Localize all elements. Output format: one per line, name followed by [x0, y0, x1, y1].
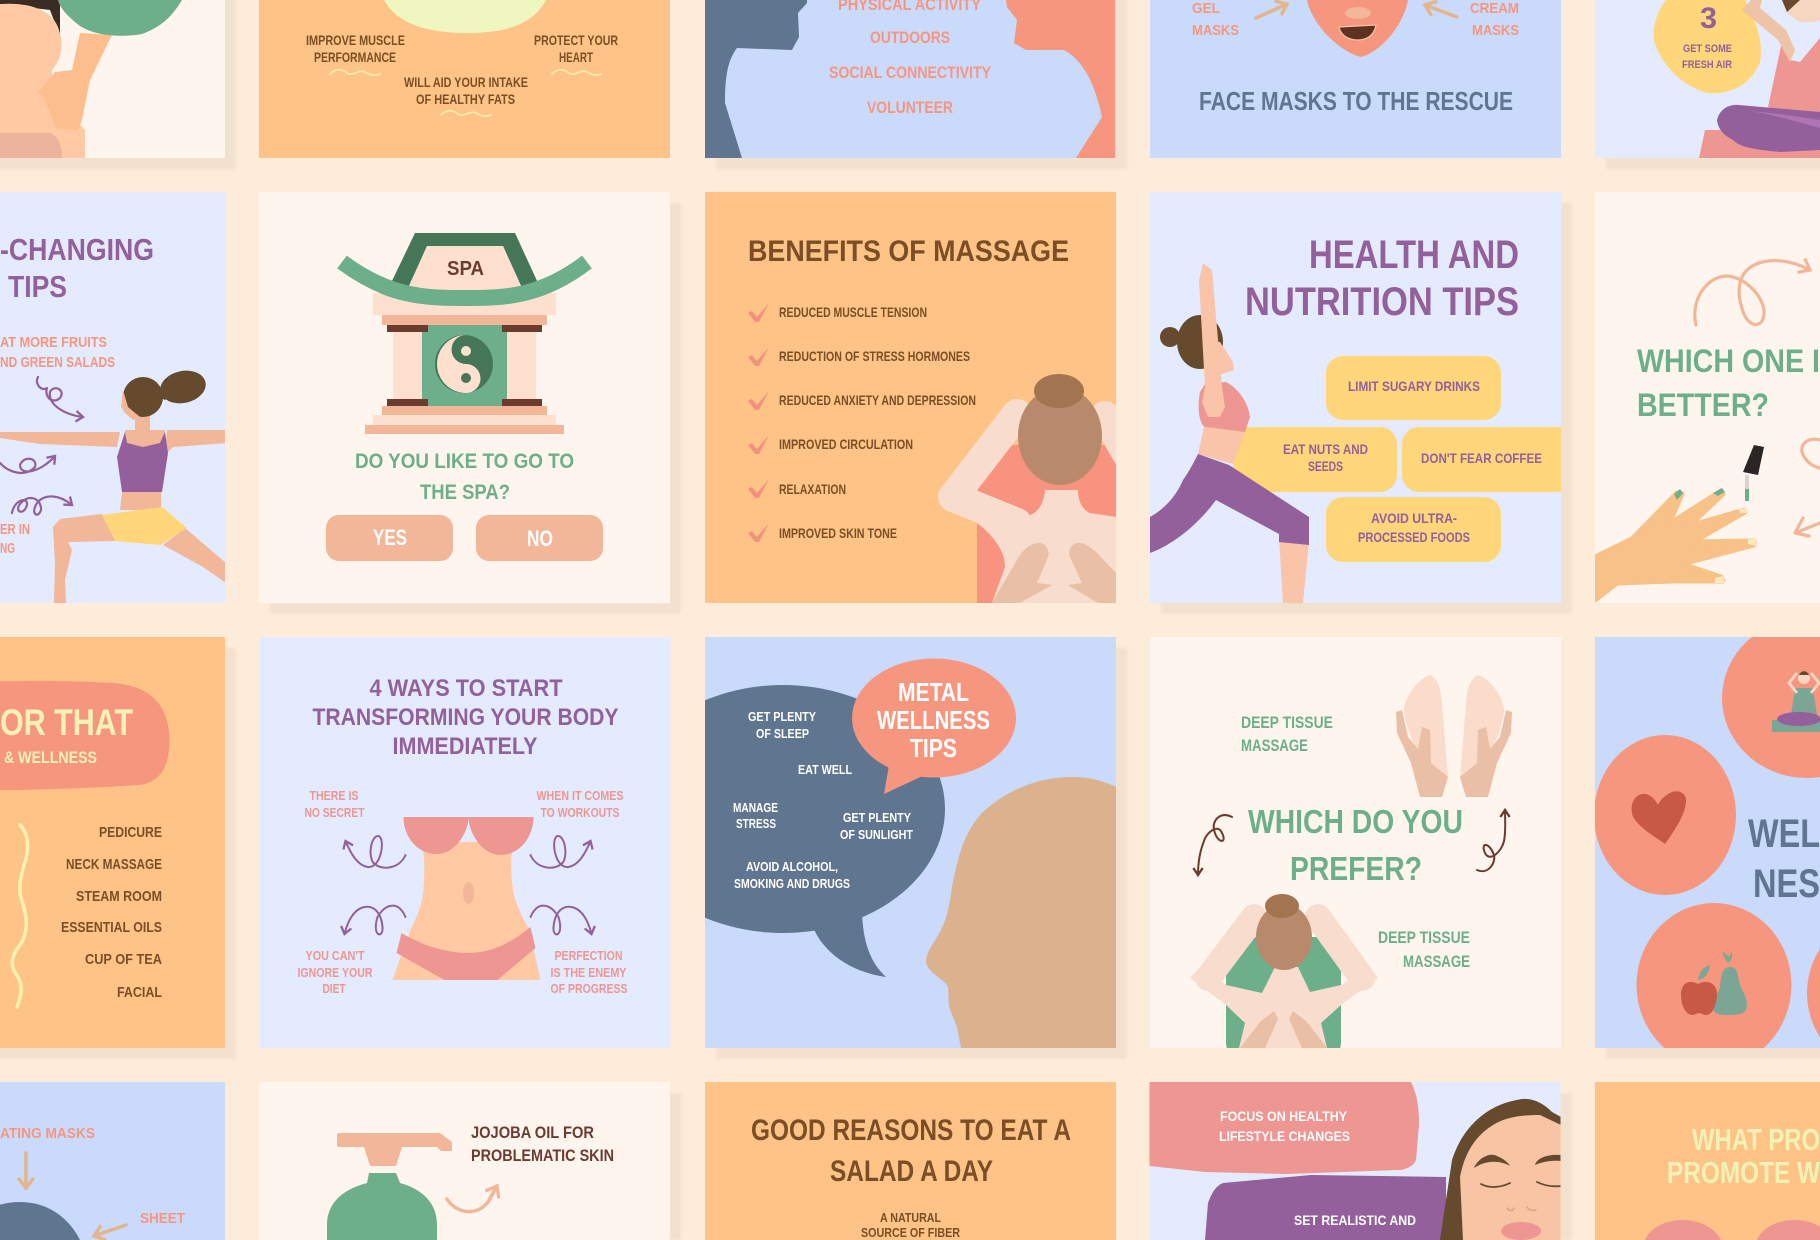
number and tip text	[1682, 7, 1732, 68]
checklist text: REDUCED MUSCLE TENSION	[779, 304, 927, 320]
label: deep tissue massage bottom: DEEP TISSUE	[1378, 928, 1470, 947]
title: FACE MASKS TO THE RESCUE	[1199, 86, 1513, 116]
product text: PROBLEMATIC SKIN	[471, 1146, 614, 1165]
arrows at right edge	[1795, 439, 1820, 536]
text: benefit list: PROTECT YOUR	[534, 32, 618, 48]
callout text: THERE IS	[310, 788, 359, 803]
banner text: OR THAT	[0, 702, 133, 743]
illustration: massage from above	[953, 374, 1133, 603]
yellow blob	[1654, 0, 1761, 93]
text: wellness list: VOLUNTEER	[867, 98, 953, 117]
text: benefit list: HEART	[559, 49, 593, 65]
mask labels	[1192, 3, 1518, 35]
illustration: massaging hands	[1396, 675, 1512, 797]
options list: ESSENTIAL OILS	[61, 919, 162, 936]
mask labels: GEL	[1192, 0, 1220, 17]
illustration: massage from above	[1190, 894, 1378, 1057]
tip block: eat nuts and seeds: SEEDS	[1308, 458, 1343, 474]
checklist text: REDUCED ANXIETY AND DEPRESSION	[779, 392, 976, 408]
pink text block: FOCUS ON HEALTHY	[1220, 1108, 1348, 1124]
text: wellness list	[829, 0, 992, 117]
tip block: eat nuts and seeds	[1233, 427, 1397, 492]
panel: massage illustration top left	[0, 0, 236, 169]
tip block: limit sugary drinks	[1326, 356, 1501, 420]
illustration: warrior pose woman	[0, 367, 226, 603]
mask labels: ATING MASKS	[0, 1125, 95, 1142]
text: benefit list	[306, 32, 618, 107]
button: yes	[326, 515, 453, 561]
label: deep tissue massage bottom	[1378, 928, 1470, 971]
speech bubble: tips: GET PLENTY	[843, 810, 911, 825]
label: deep tissue massage top	[1241, 713, 1333, 755]
title: 4 WAYS TO START	[370, 675, 563, 702]
circle: fruit icon	[1636, 903, 1792, 1067]
title	[1, 238, 152, 298]
curly arrows	[0, 377, 83, 515]
label: deep tissue massage top: DEEP TISSUE	[1241, 713, 1333, 732]
speech bubble: title	[852, 658, 1016, 794]
options list: PEDICURE	[99, 824, 162, 841]
speech bubble: tips	[621, 685, 945, 977]
illustration: woman's face	[1440, 1099, 1561, 1240]
panel: benefits of massage	[705, 192, 1133, 603]
text: benefit list: IMPROVE MUSCLE	[306, 32, 405, 48]
tip block: avoid ultra-processed foods	[1326, 497, 1501, 562]
tips text: ER IN	[0, 521, 30, 538]
label: deep tissue massage top: MASSAGE	[1241, 736, 1308, 755]
speech bubble: tips: EAT WELL	[798, 762, 852, 777]
number and tip text: 3	[1700, 2, 1717, 35]
panel: life-changing tips	[0, 192, 226, 603]
illustration: yoga pose	[1699, 0, 1820, 158]
tips text: NG	[0, 540, 15, 557]
tip block: don't fear coffee: DON'T FEAR COFFEE	[1421, 450, 1542, 466]
arrows to face	[1256, 4, 1457, 18]
text: wellness list: SOCIAL CONNECTIVITY	[829, 63, 992, 82]
speech bubble: title: TIPS	[910, 733, 957, 763]
pink text block	[1149, 1082, 1419, 1174]
button: yes: YES	[373, 525, 407, 550]
illustration: hand with nail polish	[1595, 445, 1764, 600]
speech bubble: tips: MANAGE	[733, 800, 778, 815]
illustration: spa temple: SPA	[447, 258, 484, 280]
banner subtitle: & WELLNESS	[4, 748, 97, 767]
text: benefit list: PERFORMANCE	[314, 49, 396, 65]
mask labels: MASKS	[1192, 22, 1239, 39]
question text	[1637, 343, 1820, 423]
silhouette: dark head	[704, 0, 807, 158]
panel: healthy fats benefits	[259, 0, 670, 158]
title: BENEFITS OF MASSAGE	[748, 235, 1069, 268]
question text: BETTER?	[1637, 387, 1769, 423]
title: NUTRITION TIPS	[1245, 280, 1519, 324]
illustration: torso	[392, 817, 540, 980]
reason text	[861, 1210, 960, 1240]
silhouette: salmon head	[1006, 0, 1115, 158]
speech bubble: tips: STRESS	[736, 816, 776, 831]
callout text: IGNORE YOUR	[298, 965, 373, 980]
callout text: OF PROGRESS	[550, 981, 628, 996]
panel: what products promote wellness	[1595, 1082, 1820, 1240]
speech bubble: tips: SMOKING AND DRUGS	[734, 876, 850, 891]
title: TIPS	[8, 269, 67, 304]
options list	[61, 824, 162, 1001]
mask labels	[0, 1125, 185, 1227]
speech bubble: tips: GET PLENTY	[748, 709, 816, 724]
tips text: AT MORE FRUITS	[0, 334, 107, 351]
checklist text: IMPROVED CIRCULATION	[779, 436, 913, 452]
speech bubble: title: WELLNESS	[877, 705, 990, 735]
panel: jojoba oil	[259, 1082, 681, 1240]
question text: THE SPA?	[420, 481, 510, 504]
panel: social wellness silhouettes	[704, 0, 1127, 169]
arrow	[447, 1186, 497, 1212]
question text: PREFER?	[1290, 850, 1422, 887]
illustration: yoga woman	[1150, 263, 1309, 603]
options list: FACIAL	[117, 984, 162, 1001]
panel: face masks to the rescue	[1150, 0, 1561, 158]
title: IMMEDIATELY	[392, 733, 538, 760]
button: no	[476, 515, 603, 561]
options list: NECK MASSAGE	[66, 856, 162, 873]
silhouette: head	[926, 777, 1116, 1048]
title	[1245, 233, 1519, 324]
checklist text: RELAXATION	[779, 481, 846, 497]
tip block: limit sugary drinks: LIMIT SUGARY DRINKS	[1348, 378, 1480, 394]
panel: do you like to go to the spa	[259, 192, 681, 614]
circle: yoga icon	[1722, 618, 1820, 778]
title: HEALTH AND	[1309, 233, 1519, 277]
title: TRANSFORMING YOUR BODY	[312, 704, 618, 731]
circle: partial icon right	[1807, 913, 1820, 1073]
illustration: head	[0, 1202, 80, 1240]
purple text block: SET REALISTIC AND	[1294, 1212, 1416, 1228]
options list: CUP OF TEA	[85, 951, 162, 968]
options list: STEAM ROOM	[76, 888, 162, 905]
salmon title banner	[0, 681, 169, 790]
panel: healthy lifestyle goals	[1149, 1082, 1572, 1240]
question text	[356, 454, 574, 499]
panel: hydrating and sheet masks	[0, 1082, 225, 1240]
speech bubble: tips: OF SLEEP	[756, 726, 809, 741]
reason text: A NATURAL	[880, 1210, 941, 1225]
tips text: ND GREEN SALADS	[0, 354, 115, 371]
title: -CHANGING	[0, 232, 154, 267]
panel: which one is better	[1595, 192, 1820, 603]
title	[1667, 1122, 1820, 1190]
callout text: PERFECTION	[554, 948, 622, 963]
purple text block	[1205, 1175, 1446, 1240]
tip block: don't fear coffee	[1402, 427, 1577, 492]
mask labels: SHEET	[140, 1210, 185, 1227]
question text	[1248, 803, 1463, 887]
panel: get some fresh air	[1595, 0, 1820, 169]
tips text	[0, 334, 115, 557]
callout text: TO WORKOUTS	[540, 805, 620, 820]
speech bubble: title: METAL	[898, 677, 969, 707]
title: SALAD A DAY	[830, 1155, 993, 1188]
callout text: DIET	[322, 981, 346, 996]
reason text: SOURCE OF FIBER	[861, 1225, 960, 1240]
tip block: eat nuts and seeds: EAT NUTS AND	[1283, 441, 1368, 457]
pink shapes	[1645, 1220, 1820, 1240]
title: GOOD REASONS TO EAT A	[751, 1114, 1071, 1147]
curly arrow	[1695, 261, 1810, 325]
label: deep tissue massage bottom: MASSAGE	[1403, 952, 1470, 971]
panel: 4 ways to transform your body	[260, 637, 670, 1048]
checklist text	[779, 304, 976, 541]
callout text	[298, 788, 628, 996]
panel: this or that	[0, 637, 236, 1059]
illustration: face	[1307, 0, 1408, 57]
pink text block: LIFESTYLE CHANGES	[1219, 1128, 1350, 1144]
panel: wellness circles	[1594, 618, 1820, 1073]
checklist icons	[748, 303, 769, 542]
panel: good reasons to eat a salad	[705, 1082, 1116, 1240]
product text	[471, 1123, 614, 1165]
speech bubble: tips: AVOID ALCOHOL,	[746, 859, 838, 874]
mask labels: CREAM	[1470, 0, 1519, 17]
text: wellness list: OUTDOORS	[870, 28, 950, 47]
question text: DO YOU LIKE TO GO TO	[355, 450, 574, 473]
text: benefit list: WILL AID YOUR INTAKE	[404, 74, 528, 90]
callout text: NO SECRET	[304, 805, 365, 820]
curly arrows	[344, 836, 592, 934]
illustration: pump bottle	[327, 1133, 452, 1240]
callout text: IS THE ENEMY	[550, 965, 627, 980]
panel: health and nutrition tips	[1150, 192, 1577, 614]
button: no: NO	[527, 526, 553, 551]
checklist text: REDUCTION OF STRESS HORMONES	[779, 348, 970, 364]
panel: which do you prefer	[1150, 637, 1561, 1057]
speech bubble: tips: OF SUNLIGHT	[840, 827, 913, 842]
title	[751, 1114, 1071, 1188]
illustration: spa temple	[342, 233, 587, 434]
circle: heart icon	[1594, 735, 1736, 895]
number and tip text: FRESH AIR	[1682, 59, 1732, 71]
panel: mental wellness tips	[621, 637, 1127, 1059]
curly arrows	[1198, 810, 1505, 875]
mask labels: MASKS	[1472, 22, 1519, 39]
question text: WHICH DO YOU	[1248, 803, 1463, 840]
product text: JOJOBA OIL FOR	[471, 1123, 594, 1142]
checklist text: IMPROVED SKIN TONE	[779, 525, 897, 541]
title	[312, 675, 618, 760]
number and tip text: GET SOME	[1683, 43, 1732, 55]
tip block: avoid ultra-processed foods: PROCESSED FOODS	[1358, 529, 1470, 545]
title	[1748, 812, 1820, 906]
callout text: WHEN IT COMES	[536, 788, 624, 803]
wavy divider	[12, 825, 28, 1007]
arrows	[26, 1153, 126, 1236]
callout text: YOU CAN'T	[306, 948, 365, 963]
pale green fruit	[384, 0, 546, 33]
text: benefit list: OF HEALTHY FATS	[416, 91, 515, 107]
tip block: avoid ultra-processed foods: AVOID ULTRA-	[1371, 510, 1457, 526]
